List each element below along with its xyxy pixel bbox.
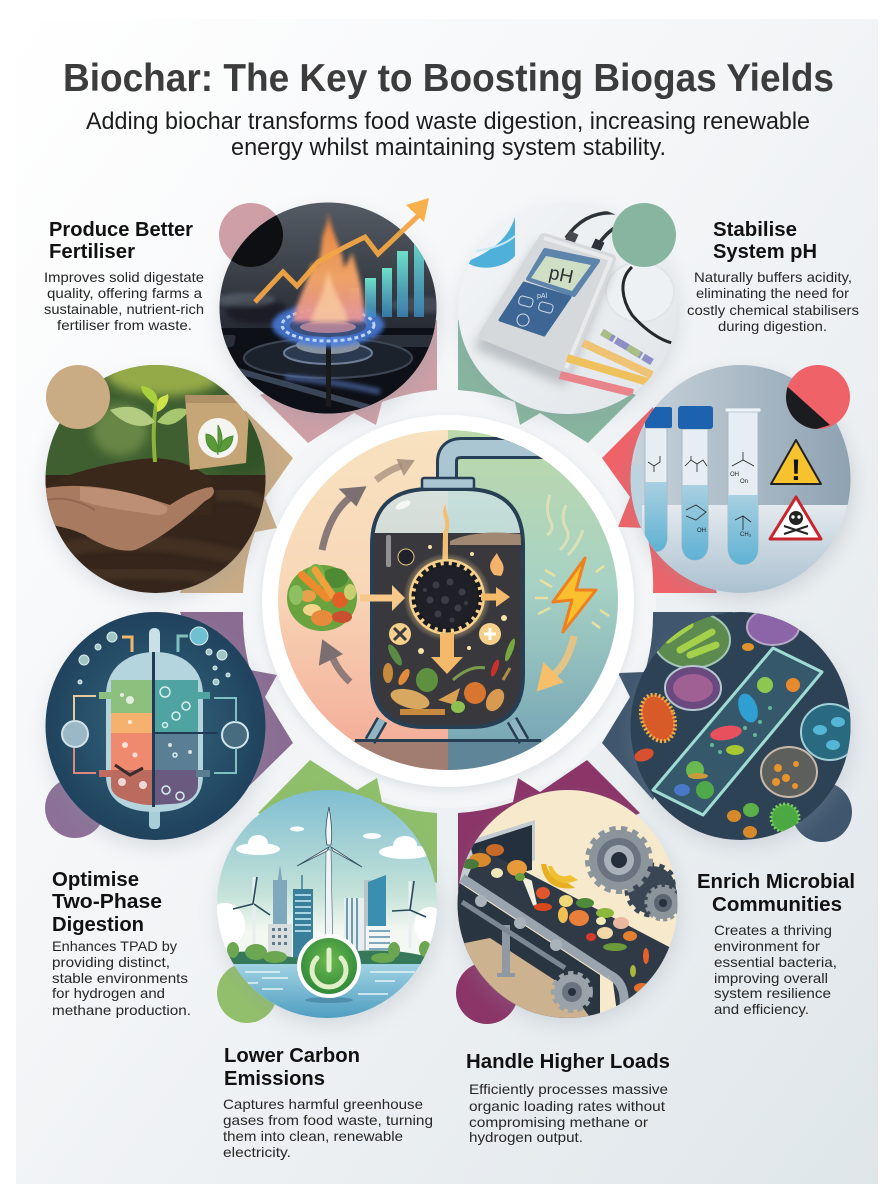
- text: lower carbon emissions: Emissions: [224, 1068, 325, 1090]
- text: lower carbon emissions: electricity.: [223, 1144, 291, 1160]
- icon: food waste bowl: [287, 564, 357, 631]
- panel: chemical stabilisers image: OH: [730, 472, 739, 478]
- icon: tank legs: [355, 720, 541, 742]
- text: enrich microbial communities: system resilience: [714, 985, 831, 1001]
- text: handle higher loads: [466, 1051, 670, 1145]
- text: produce better fertiliser: Produce Better: [49, 219, 193, 241]
- text: optimise two-phase digestion: Two-Phase: [52, 891, 162, 913]
- title: Biochar: The Key to Boosting Biogas Yields: [63, 57, 834, 100]
- panel: carbon emissions cityscape image: [205, 760, 446, 1024]
- panel: pH meter image: [455, 198, 680, 443]
- icon: curved arrows: [320, 460, 574, 690]
- text: stabilise system pH: during digestion.: [718, 318, 827, 334]
- text: enrich microbial communities: Enrich Microbial: [697, 871, 855, 893]
- text: handle higher loads: Efficiently processes massive: [469, 1081, 668, 1097]
- text: enrich microbial communities: [697, 871, 855, 1017]
- text: lower carbon emissions: gases from food waste, turning: [223, 1112, 433, 1128]
- text: lower carbon emissions: them into clean, renewable: [223, 1128, 403, 1144]
- subtitle: energy whilst maintaining system stability.: [231, 134, 666, 161]
- icon: vapour lines: [547, 495, 583, 555]
- text: produce better fertiliser: Improves solid digestate: [44, 269, 204, 285]
- subtitle: Adding biochar transforms food waste digestion, increasing renewable: [86, 108, 810, 135]
- text: optimise two-phase digestion: methane production.: [52, 1002, 191, 1018]
- text: produce better fertiliser: fertiliser from waste.: [57, 317, 192, 333]
- panel: two-phase digestion image: [43, 612, 293, 846]
- text: optimise two-phase digestion: Digestion: [52, 914, 144, 936]
- panel: chemical stabilisers image: On: [740, 479, 748, 485]
- text: stabilise system pH: Stabilise: [713, 219, 797, 241]
- text: enrich microbial communities: essential bacteria,: [714, 954, 837, 970]
- panel: fertiliser image: [45, 348, 293, 599]
- text: produce better fertiliser: sustainable, nutrient-rich: [44, 301, 204, 317]
- subtitle: [86, 108, 810, 161]
- text: enrich microbial communities: environment for: [714, 938, 820, 954]
- text: optimise two-phase digestion: Enhances TPAD by: [52, 938, 177, 954]
- text: handle higher loads: organic loading rates without: [469, 1098, 665, 1114]
- icon: feed arrow: [360, 585, 405, 611]
- text: lower carbon emissions: [223, 1045, 433, 1160]
- text: enrich microbial communities: Creates a thriving: [714, 922, 832, 938]
- panel: microbial communities image: [602, 609, 859, 846]
- text: enrich microbial communities: improving overall: [714, 970, 828, 986]
- panel: chemical stabilisers image: CH₃: [740, 532, 752, 538]
- text: handle higher loads: compromising methane or: [469, 1114, 648, 1130]
- panel: biogas flame image: [216, 198, 444, 443]
- panel: pH meter image: pH: [547, 263, 575, 288]
- text: stabilise system pH: Naturally buffers acidity,: [694, 269, 852, 285]
- text: enrich microbial communities: Communities: [712, 894, 842, 916]
- text: stabilise system pH: System pH: [713, 241, 817, 263]
- panel: pH meter image: pAl: [537, 293, 548, 300]
- text: stabilise system pH: costly chemical stabilisers: [687, 302, 859, 318]
- panel: high loads conveyor image: [455, 760, 680, 1024]
- text: optimise two-phase digestion: Optimise: [52, 869, 139, 891]
- central digester diagram: [262, 415, 634, 790]
- panel: chemical stabilisers image: !: [791, 454, 801, 487]
- text: optimise two-phase digestion: [52, 869, 191, 1018]
- text: produce better fertiliser: [44, 219, 204, 333]
- text: handle higher loads: Handle Higher Loads: [466, 1051, 670, 1073]
- text: optimise two-phase digestion: for hydrogen and: [52, 985, 165, 1001]
- text: produce better fertiliser: Fertiliser: [49, 241, 135, 263]
- text: handle higher loads: hydrogen output.: [469, 1129, 583, 1145]
- icon: lightning bolt: [535, 558, 609, 632]
- text: optimise two-phase digestion: stable environments: [52, 970, 188, 986]
- icon: tank: [370, 478, 526, 733]
- text: produce better fertiliser: quality, offering farms a: [47, 285, 202, 301]
- text: stabilise system pH: [687, 219, 859, 334]
- text: lower carbon emissions: Captures harmful greenhouse: [223, 1096, 423, 1112]
- text: enrich microbial communities: and efficiency.: [714, 1001, 809, 1017]
- text: optimise two-phase digestion: providing distinct,: [52, 954, 170, 970]
- panel: chemical stabilisers image: [602, 365, 852, 599]
- icon: digester pipe: [447, 448, 552, 480]
- text: stabilise system pH: eliminating the need for: [696, 285, 849, 301]
- text: lower carbon emissions: Lower Carbon: [224, 1045, 360, 1067]
- panel: chemical stabilisers image: OH: [697, 528, 706, 534]
